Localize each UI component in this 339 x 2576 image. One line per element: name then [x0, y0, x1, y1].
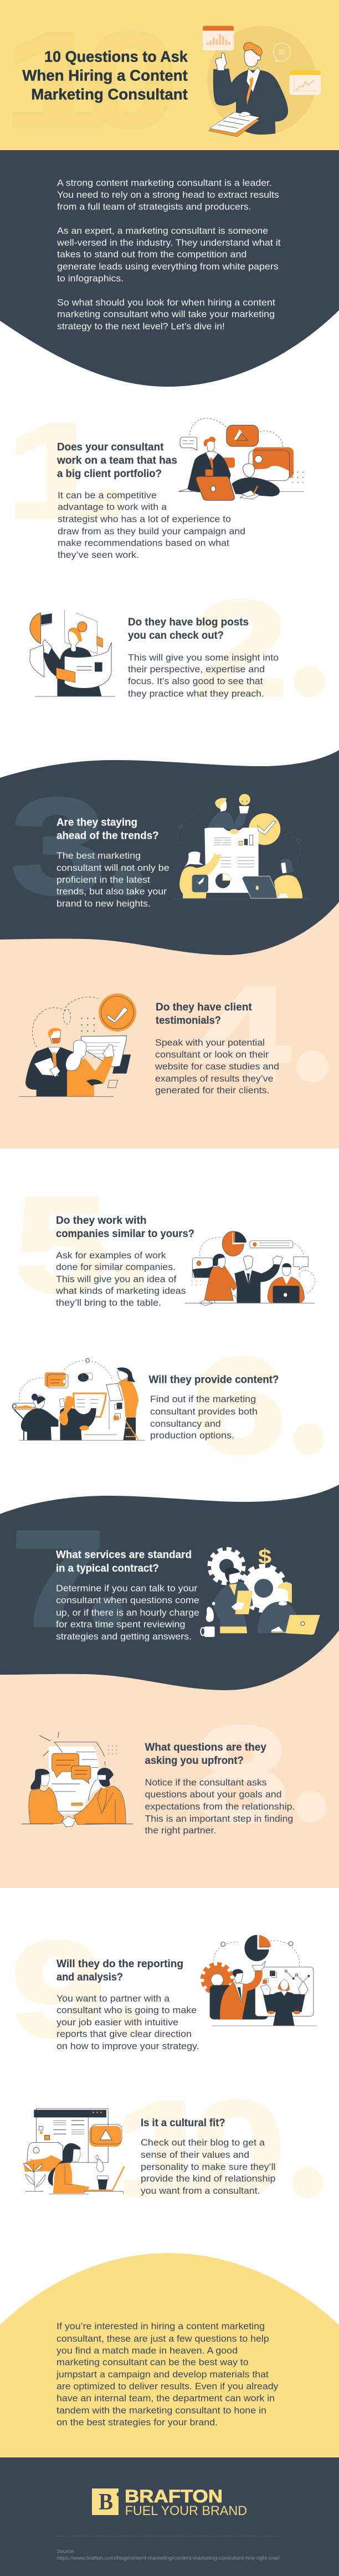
panel: question 10	[23, 2072, 323, 2224]
conclusion text	[56, 2322, 279, 2428]
source text: Source:	[57, 2549, 75, 2554]
icon: gears	[209, 1549, 286, 1610]
body text 2: their perspective, expertise and	[128, 664, 265, 674]
body text 9: on how to improve your strategy.	[56, 2041, 199, 2051]
body text 7: up, or if there is an hourly charge	[56, 1608, 199, 1618]
illustration: gears and service team	[201, 1545, 320, 1637]
panel: footer	[0, 2457, 339, 2576]
body text 4: consultant or look on their	[155, 1050, 269, 1060]
body text 5	[55, 1250, 186, 1308]
background number 10	[3, 4, 178, 156]
title	[22, 48, 188, 103]
conclusion text: consultant, these are just a few questions to help	[56, 2334, 269, 2344]
illustration: consultant with charts	[203, 26, 321, 137]
body text 7	[56, 1583, 199, 1641]
logo: Brafton: FUEL YOUR BRAND	[125, 2503, 247, 2518]
body text 3: trends, but also take your	[56, 887, 167, 897]
body text 10: you want from a consultant.	[141, 2186, 260, 2196]
intro text: marketing consultant who will take your marketing	[57, 310, 275, 320]
illustration: team discussion	[185, 1231, 315, 1306]
heading 5: Do they work with	[56, 1215, 146, 1227]
intro text: from a full team of strategists and producers.	[57, 202, 251, 212]
body text 3	[56, 851, 170, 909]
icon: bar chart card	[203, 26, 234, 50]
body text 10: Check out their blog to get a	[141, 2138, 265, 2148]
panel: question 6	[12, 1330, 324, 1481]
conclusion text: jumpstart a campaign and develop materials that	[56, 2370, 269, 2380]
logo: Brafton: BRAFTON	[125, 2486, 223, 2506]
heading 3	[56, 817, 159, 841]
title: 10 Questions to Ask	[44, 48, 188, 65]
background number 3	[11, 770, 143, 922]
intro text: strategy to the next level? Let’s dive in!	[57, 322, 225, 332]
heading 6: Will they provide content?	[148, 1374, 279, 1386]
illustration: reporting and analysis	[203, 1934, 317, 2026]
heading 1	[56, 442, 177, 480]
heading 10: Is it a cultural fit?	[141, 2117, 225, 2129]
body text 4	[155, 1038, 279, 1096]
body text 8: questions about your goals and	[145, 1790, 281, 1800]
intro text: generate leads using everything from white papers	[57, 262, 279, 272]
conclusion text: you find a match made in heaven. A good	[56, 2346, 238, 2356]
heading 5	[56, 1215, 194, 1240]
icon: gear	[203, 1964, 232, 1993]
source text: https://www.brafton.com/blog/content-marketing/content-marketing-consultant-hire-right-one/	[57, 2556, 280, 2561]
illustration: content production team	[12, 1358, 145, 1440]
panel: introduction	[0, 150, 339, 387]
background number 4	[195, 957, 328, 1109]
intro text: So what should you look for when hiring a content	[57, 297, 275, 307]
background number 7: 7	[11, 1502, 105, 1654]
background number 2: 2	[193, 572, 287, 724]
body text 5: Ask for examples of work	[56, 1250, 167, 1260]
man	[209, 43, 288, 137]
wave background: peach behind question 8	[0, 1623, 339, 1888]
body text 8: the right partner.	[145, 1825, 216, 1835]
icon: dollar sign: $	[258, 1545, 271, 1568]
background number 10: 0	[84, 4, 178, 156]
body text 2: This will give you some insight into	[128, 653, 279, 663]
body text 8: expectations from the relationship.	[145, 1802, 295, 1812]
body text 2: focus. It’s also good to see that	[128, 676, 263, 686]
body text 2	[128, 653, 279, 699]
intro text: A strong content marketing consultant is a leader.	[57, 178, 272, 188]
background number 7	[11, 1502, 123, 1654]
body text 1: strategist who has a lot of experience to	[58, 514, 231, 524]
heading 9	[56, 1958, 183, 1983]
background number 1	[6, 394, 123, 546]
wave background: peach behind question 4	[0, 886, 339, 1148]
body text 1: draw from as they build your campaign and	[58, 526, 245, 536]
body text 3: consultant will not only be	[56, 863, 170, 873]
heading 1: work on a team that has	[56, 455, 177, 466]
body text 6: Find out if the marketing	[150, 1394, 256, 1404]
panel: question 3	[0, 750, 339, 955]
conclusion text: tandem with the marketing consultant to hone in	[56, 2405, 266, 2415]
heading 2: you can check out?	[128, 630, 224, 642]
heading 7: in a typical contract?	[56, 1563, 159, 1574]
background number 3: 3	[11, 770, 105, 922]
icon: line chart card	[290, 70, 321, 95]
body text 4: generated for their clients.	[155, 1086, 269, 1096]
background number 8	[194, 1698, 326, 1850]
heading 3: ahead of the trends?	[56, 830, 159, 841]
body text 5: This will give you an idea of	[56, 1274, 177, 1284]
intro text: You need to rely on a strong head to extract results	[57, 190, 279, 200]
conclusion text: have an internal team, the department can work in	[56, 2394, 275, 2404]
illustration: woman reading blog on laptop	[23, 2108, 124, 2194]
body text 9: your job easier with intuitive	[56, 2018, 178, 2028]
heading 7	[56, 1549, 192, 1574]
body text 3: brand to new heights.	[56, 899, 151, 909]
panel: header	[0, 0, 339, 156]
body text 7: strategies and getting answers.	[56, 1631, 192, 1641]
illustration: woman with floating pages	[30, 610, 115, 696]
conclusion text: are optimized to deliver results. Even if you already	[56, 2382, 279, 2392]
body text 10: personality to make sure they’ll	[141, 2162, 276, 2172]
body text 9: reports that give clear direction	[56, 2029, 192, 2039]
body text 8	[145, 1778, 295, 1835]
body text 1: It can be a competitive	[58, 491, 157, 501]
body text 10: sense of their values and	[141, 2150, 249, 2160]
illustration: team with laptop	[178, 418, 304, 500]
panel: question 9	[11, 1913, 317, 2065]
body text 8: This is an important step in finding	[145, 1814, 293, 1824]
body text 4: examples of results they’ve	[155, 1074, 274, 1084]
body text 9	[56, 1994, 199, 2051]
body text 7: Determine if you can talk to your	[56, 1583, 198, 1593]
body text 4: website for case studies and	[155, 1061, 279, 1071]
panel: question 2	[30, 572, 325, 724]
background number 5	[14, 1168, 145, 1320]
panel: question 7	[0, 1485, 339, 1690]
body text 6: production options.	[150, 1430, 234, 1440]
heading 4: Do they have client	[156, 1002, 252, 1013]
background number 10: 1	[3, 4, 106, 156]
body text 5: done for similar companies.	[56, 1262, 176, 1272]
background number 8: 8	[194, 1698, 288, 1850]
background number 5: 5	[14, 1168, 109, 1320]
logo: Brafton	[92, 2486, 247, 2518]
body text 10	[141, 2138, 276, 2196]
body text 3: The best marketing	[56, 851, 141, 861]
source text	[57, 2549, 280, 2561]
body text 5: they’ll bring to the table.	[56, 1298, 161, 1308]
illustration: team at report board	[172, 794, 310, 899]
heading 1: Does your consultant	[57, 442, 164, 453]
icon: speech bubble	[274, 43, 290, 62]
body text 6: consultancy and	[150, 1419, 221, 1429]
background number 2	[193, 572, 325, 724]
illustration: handshake	[22, 1732, 133, 1827]
body text 7: consultant when questions come	[56, 1595, 199, 1605]
heading 3: Are they staying	[56, 817, 137, 829]
body text 9: consultant who is going to make	[56, 2005, 197, 2015]
panel: question 8	[22, 1698, 326, 1850]
background number 9: 9	[11, 1913, 105, 2065]
heading 2	[128, 617, 249, 642]
background number 9	[11, 1913, 143, 2065]
intro text	[56, 178, 281, 332]
heading 1: a big client portfolio?	[57, 468, 162, 480]
body text 1: advantage to work with a	[58, 502, 167, 512]
body text 1: make recommendations based on what	[58, 538, 229, 548]
body text 7: for extra time spent reviewing	[56, 1620, 185, 1630]
background number 10	[114, 2072, 323, 2224]
body text 8: Notice if the consultant asks	[145, 1778, 267, 1788]
intro text: takes to stand out from the competition and	[57, 250, 246, 260]
heading 2: Do they have blog posts	[128, 617, 249, 628]
illustration: client approval	[19, 993, 136, 1096]
heading 9: and analysis?	[56, 1972, 123, 1983]
conclusion text: marketing consultant can be the best way to	[56, 2358, 249, 2368]
panel: question 4	[19, 957, 328, 1109]
background number 4: 4	[195, 957, 290, 1109]
conclusion text: If you’re interested in hiring a content marketing	[56, 2322, 265, 2332]
body text 2: they practice what they preach.	[128, 689, 264, 699]
background number 10: 1	[114, 2072, 217, 2224]
body text 3: proficient in the latest	[56, 875, 150, 885]
panel: question 1	[6, 394, 304, 560]
background number 6: 6	[192, 1330, 286, 1481]
heading 4	[156, 1002, 252, 1027]
intro text: As an expert, a marketing consultant is someone	[57, 226, 268, 236]
heading 8	[145, 1742, 266, 1767]
body text 1	[58, 491, 245, 560]
body text 4: Speak with your potential	[155, 1038, 265, 1048]
heading 9: Will they do the reporting	[56, 1958, 183, 1970]
logo: Brafton: B	[99, 2490, 113, 2515]
body text 9: You want to partner with a	[56, 1994, 170, 2004]
title: Marketing Consultant	[31, 85, 188, 103]
heading 8: What questions are they	[145, 1742, 266, 1753]
intro text: to infographics.	[57, 274, 124, 284]
intro text: well-versed in the industry. They understand what it	[56, 238, 281, 248]
body text 1: they’ve seen work.	[58, 550, 139, 560]
heading 5: companies similar to yours?	[56, 1228, 194, 1240]
heading 7: What services are standard	[56, 1549, 192, 1561]
panel: question 5	[14, 1168, 315, 1320]
body text 10: provide the kind of relationship	[141, 2174, 276, 2184]
title: When Hiring a Content	[22, 66, 188, 84]
body text 6: consultant provides both	[150, 1407, 258, 1417]
conclusion text: on the best strategies for your brand.	[56, 2418, 218, 2428]
heading 4: testimonials?	[156, 1015, 221, 1027]
background number 1: 1	[6, 394, 109, 546]
panel: conclusion	[0, 2253, 339, 2457]
body text 6	[150, 1394, 258, 1440]
heading 8: asking you upfront?	[145, 1755, 244, 1767]
background number 6	[192, 1330, 324, 1481]
body text 5: what kinds of marketing ideas	[55, 1286, 186, 1296]
background number 10: 0	[191, 2072, 285, 2224]
